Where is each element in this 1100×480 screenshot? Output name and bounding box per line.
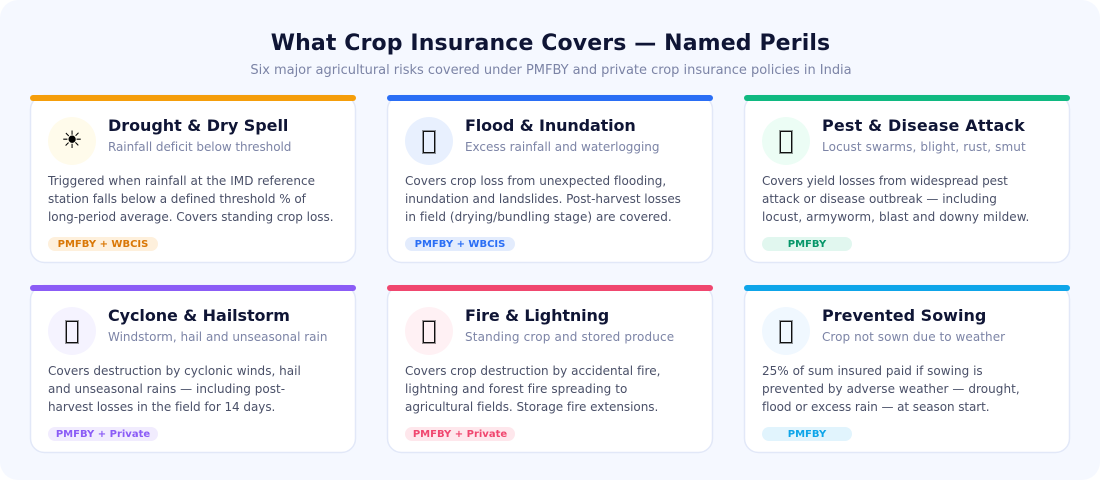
heading: pest: Pest & Disease Attack bbox=[822, 116, 1025, 135]
text block: cyclone bbox=[48, 364, 301, 414]
card body: flood bbox=[386, 94, 714, 264]
subheading: cyclone: Windstorm, hail and unseasonal rain bbox=[108, 330, 327, 344]
text block: cyclone: harvest losses in the field for 14 days. bbox=[48, 400, 275, 414]
subheading: flood: Excess rainfall and waterlogging bbox=[465, 140, 659, 154]
text block: flood: inundation and landslides. Post-harvest losses bbox=[405, 192, 681, 206]
text block: pest: attack or disease outbreak — including bbox=[762, 192, 997, 206]
text block: prevented sowing bbox=[762, 364, 1020, 414]
tag: drought bbox=[48, 237, 158, 251]
panel: flood bbox=[386, 94, 714, 264]
accent bar: fire bbox=[387, 285, 713, 291]
card body: pest bbox=[744, 94, 1070, 264]
accent bar: pest bbox=[744, 95, 1070, 101]
tag: prevented sowing: PMFBY bbox=[788, 429, 826, 440]
panel: cyclone bbox=[30, 284, 356, 454]
tag: flood bbox=[405, 237, 515, 251]
heading: flood: Flood & Inundation bbox=[465, 116, 636, 135]
text block: pest: Covers yield losses from widespread pest bbox=[762, 174, 1008, 188]
text block: drought: station falls below a defined threshold % of bbox=[48, 192, 306, 206]
card body: fire bbox=[386, 284, 714, 454]
icon: missing-glyph box on sky circle bbox=[762, 307, 810, 355]
tag: fire: PMFBY + Private bbox=[413, 429, 507, 440]
accent bar: cyclone bbox=[30, 285, 356, 291]
tag: drought: PMFBY + WBCIS bbox=[58, 239, 148, 250]
panel: drought bbox=[30, 94, 356, 264]
subheading: prevented sowing: Crop not sown due to weather bbox=[822, 330, 1005, 344]
subtitle: Six major agricultural risks covered under PMFBY and private crop insurance policies in India bbox=[250, 63, 852, 78]
text block: flood: Covers crop loss from unexpected flooding, bbox=[405, 174, 666, 188]
tag: cyclone bbox=[48, 427, 158, 441]
text block: drought: long-period average. Covers standing crop loss. bbox=[48, 210, 333, 224]
subheading: fire: Standing crop and stored produce bbox=[465, 330, 674, 344]
text block: prevented sowing: prevented by adverse weather — drought, bbox=[762, 382, 1020, 396]
text block: flood: in field (drying/bundling stage) are covered. bbox=[405, 210, 672, 224]
text block: prevented sowing: 25% of sum insured paid if sowing is bbox=[762, 364, 983, 378]
text block: fire bbox=[405, 364, 660, 414]
icon: missing-glyph box on violet circle bbox=[48, 307, 96, 355]
subheading: drought: Rainfall deficit below threshold bbox=[108, 140, 291, 154]
card body: cyclone bbox=[30, 284, 356, 454]
accent bar: flood bbox=[387, 95, 713, 101]
card body: drought bbox=[30, 94, 356, 264]
panel: pest bbox=[744, 94, 1070, 264]
tag: flood: PMFBY + WBCIS bbox=[415, 239, 505, 250]
tag: pest bbox=[762, 237, 852, 251]
text block: cyclone: Covers destruction by cyclonic winds, hail bbox=[48, 364, 301, 378]
text block: cyclone: and unseasonal rains — including post- bbox=[48, 382, 285, 396]
heading: cyclone: Cyclone & Hailstorm bbox=[108, 306, 290, 325]
tag: cyclone: PMFBY + Private bbox=[56, 429, 150, 440]
icon: sun: ☀ bbox=[61, 126, 83, 154]
icon: missing-glyph box on green circle bbox=[762, 117, 810, 165]
accent bar: drought bbox=[30, 95, 356, 101]
text block: fire: agricultural fields. Storage fire extensions. bbox=[405, 400, 658, 414]
text block: prevented sowing: flood or excess rain — at season start. bbox=[762, 400, 990, 414]
panel: prevented sowing bbox=[744, 284, 1070, 454]
heading: drought: Drought & Dry Spell bbox=[108, 116, 288, 135]
icon: sun bbox=[48, 117, 96, 165]
tag: pest: PMFBY bbox=[788, 239, 826, 250]
text block: flood bbox=[405, 174, 681, 224]
text block: drought bbox=[48, 174, 333, 224]
card body: prevented sowing bbox=[744, 284, 1070, 454]
tag: prevented sowing bbox=[762, 427, 852, 441]
text block: fire: Covers crop destruction by accidental fire, bbox=[405, 364, 660, 378]
heading: fire: Fire & Lightning bbox=[465, 306, 609, 325]
icon: missing-glyph box on blue circle bbox=[405, 117, 453, 165]
text block: pest bbox=[762, 174, 1029, 224]
accent bar: prevented sowing bbox=[744, 285, 1070, 291]
text block: drought: Triggered when rainfall at the IMD reference bbox=[48, 174, 315, 188]
text block: fire: lightning and forest fire spreading to bbox=[405, 382, 627, 396]
subheading: pest: Locust swarms, blight, rust, smut bbox=[822, 140, 1026, 154]
heading: prevented sowing: Prevented Sowing bbox=[822, 306, 986, 325]
panel: fire bbox=[386, 284, 714, 454]
tag: fire bbox=[405, 427, 515, 441]
title: What Crop Insurance Covers — Named Perils bbox=[271, 31, 830, 56]
icon: missing-glyph box on pink circle bbox=[405, 307, 453, 355]
text block: pest: locust, armyworm, blast and downy mildew. bbox=[762, 210, 1029, 224]
